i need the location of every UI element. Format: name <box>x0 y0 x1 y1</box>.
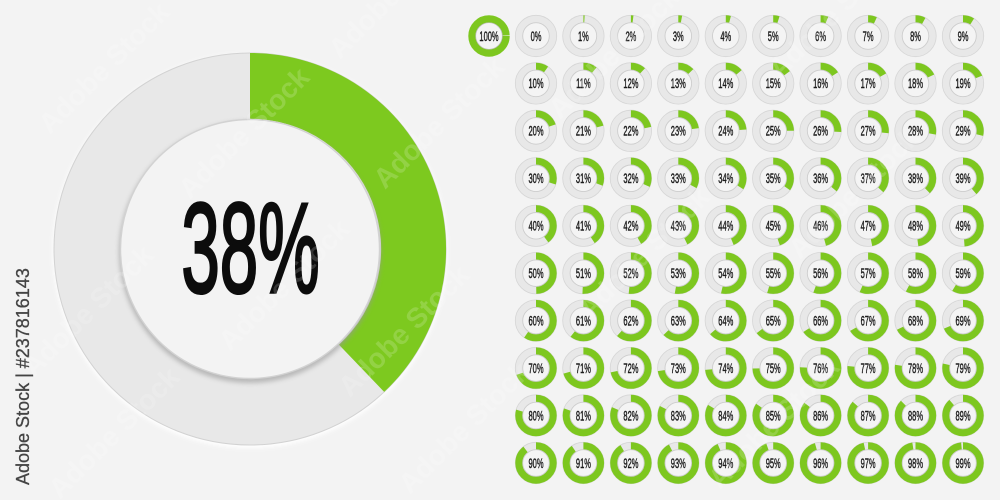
dial 59% <box>942 253 984 294</box>
watermarks: Adobe Stock <box>32 0 176 139</box>
dial 12% <box>610 63 652 104</box>
dial 85%: 85% <box>766 409 781 424</box>
dial 11% <box>563 63 604 104</box>
dial 68%: 68% <box>908 314 923 329</box>
dial 38% <box>895 158 936 199</box>
dial 45% <box>752 205 794 246</box>
dial 82% <box>610 395 652 436</box>
dial 32%: 32% <box>623 172 639 187</box>
dial 2%: 2% <box>625 30 637 45</box>
dial 23%: 23% <box>671 125 686 139</box>
dial 63%: 63% <box>671 314 686 329</box>
dial 19%: 19% <box>955 77 971 92</box>
dial 9% <box>942 15 984 57</box>
dial 22% <box>610 110 652 152</box>
dial 31%: 31% <box>576 172 591 187</box>
dial 69%: 69% <box>955 314 971 329</box>
watermarks: Adobe Stock <box>42 361 186 500</box>
dial 42% <box>610 205 652 246</box>
dial 12%: 12% <box>623 77 639 92</box>
dial 17%: 17% <box>861 77 876 92</box>
dial 17% <box>847 63 889 104</box>
dial 48% <box>895 205 936 246</box>
dial 36% <box>800 158 841 199</box>
dial 88% <box>895 395 936 436</box>
dial 42%: 42% <box>623 219 639 234</box>
dial 97% <box>847 442 889 484</box>
watermarks: Adobe Stock <box>367 51 511 194</box>
dial 9%: 9% <box>958 30 969 45</box>
dial 85% <box>752 395 794 436</box>
dial 35%: 35% <box>766 172 781 187</box>
center disc <box>120 120 380 378</box>
dial 24% <box>705 110 746 152</box>
dial 10%: 10% <box>528 77 544 92</box>
dial 77% <box>847 347 889 389</box>
dial 54%: 54% <box>718 267 734 282</box>
dial 65%: 65% <box>766 314 781 329</box>
dial 33% <box>658 158 699 199</box>
stock id vertical text: Adobe Stock | #237816143 <box>13 268 33 485</box>
dial 18% <box>895 63 936 104</box>
dial 55% <box>752 253 794 294</box>
dial 60%: 60% <box>528 314 544 329</box>
dial 98% <box>895 442 936 484</box>
dial 89%: 89% <box>955 409 971 424</box>
dial 31% <box>563 158 604 199</box>
dial 95% <box>752 442 794 484</box>
dial 66%: 66% <box>813 314 828 329</box>
dial 65% <box>752 300 794 341</box>
dial 11%: 11% <box>576 77 591 92</box>
dial 90% <box>515 442 557 484</box>
dial 75% <box>752 347 794 389</box>
dial 83% <box>658 395 699 436</box>
watermarks: Adobe Stock <box>702 351 846 494</box>
dial 6% <box>800 15 841 57</box>
dial 29% <box>942 110 984 152</box>
dial 64% <box>705 300 746 341</box>
dial 15% <box>752 63 794 104</box>
center disc shadow <box>119 121 381 383</box>
dial 76%: 76% <box>813 362 828 377</box>
dial 75%: 75% <box>766 362 781 377</box>
dial 68% <box>895 300 936 341</box>
dial 56% <box>800 253 841 294</box>
dial 5%: 5% <box>768 30 779 45</box>
dial 84%: 84% <box>718 409 734 424</box>
dial 98%: 98% <box>908 457 923 472</box>
dial 94% <box>705 442 746 484</box>
dial 46% <box>800 205 841 246</box>
dial 69% <box>942 300 984 341</box>
dial 52% <box>610 253 652 294</box>
dial 70% <box>515 347 557 389</box>
big percentage value: 38% <box>181 177 320 320</box>
dial 14%: 14% <box>718 77 734 92</box>
dial 4% <box>705 15 746 57</box>
dial 43% <box>658 205 699 246</box>
dial 3% <box>658 15 699 57</box>
dial 67%: 67% <box>861 314 876 329</box>
dial 4%: 4% <box>720 30 731 45</box>
dial 87% <box>847 395 889 436</box>
dial 39% <box>942 158 984 199</box>
dial 25% <box>752 110 794 152</box>
dial grid: 0 to 100 percent <box>472 15 984 484</box>
dial 87%: 87% <box>861 409 876 424</box>
dial 7% <box>847 15 889 57</box>
dial 54% <box>705 253 746 294</box>
dial 96% <box>800 442 841 484</box>
dial 80% <box>515 395 557 436</box>
dial 40%: 40% <box>528 219 544 234</box>
dial 7%: 7% <box>863 30 874 45</box>
large donut chart: 38% <box>53 53 447 448</box>
dial 40% <box>515 205 557 246</box>
dial 5% <box>752 15 794 57</box>
dial 20% <box>515 110 557 152</box>
dial 32% <box>610 158 652 199</box>
dial 27% <box>847 110 889 152</box>
dial 10% <box>515 63 557 104</box>
dial 76% <box>800 347 841 389</box>
dial 15%: 15% <box>766 77 781 92</box>
donut track <box>54 53 446 445</box>
dial 41%: 41% <box>576 219 591 234</box>
dial 3%: 3% <box>673 30 684 45</box>
dial 55%: 55% <box>766 267 781 282</box>
watermarks: Adobe Stock <box>392 356 536 499</box>
dial 16%: 16% <box>813 77 828 92</box>
dial 27%: 27% <box>861 125 876 139</box>
dial 38%: 38% <box>908 172 923 187</box>
dial 28% <box>895 110 936 152</box>
dial 29%: 29% <box>955 125 971 139</box>
dial 26% <box>800 110 841 152</box>
dial 74% <box>705 347 746 389</box>
dial 93%: 93% <box>671 457 686 472</box>
dial 30%: 30% <box>528 172 544 187</box>
dial 81%: 81% <box>576 409 591 424</box>
dial 74%: 74% <box>718 362 734 377</box>
dial 43%: 43% <box>671 219 686 234</box>
dial 80%: 80% <box>528 409 544 424</box>
dial 100% <box>472 19 506 53</box>
dial 44%: 44% <box>718 219 734 234</box>
dial 93% <box>658 442 699 484</box>
dial 50% <box>515 253 557 294</box>
dial 53%: 53% <box>671 267 686 282</box>
dial 33%: 33% <box>671 172 686 187</box>
dial 46%: 46% <box>813 219 828 234</box>
dial 62% <box>610 300 652 341</box>
dial 64%: 64% <box>718 314 734 329</box>
dial 1%: 1% <box>578 30 589 45</box>
donut green segment 38% <box>250 53 446 392</box>
dial 61% <box>563 300 604 341</box>
watermarks: Adobe Stock <box>782 121 926 264</box>
dial 37%: 37% <box>861 172 876 187</box>
dial 6%: 6% <box>815 30 826 45</box>
watermarks: Adobe Stock <box>572 181 716 324</box>
dial 86%: 86% <box>813 409 828 424</box>
dial 60% <box>515 300 557 341</box>
dial 79%: 79% <box>955 362 971 377</box>
dial 81% <box>563 395 604 436</box>
dial 56%: 56% <box>813 267 828 282</box>
dial 13%: 13% <box>671 77 686 92</box>
dial 95%: 95% <box>766 457 781 472</box>
dial 94%: 94% <box>718 457 734 472</box>
dial 79% <box>942 347 984 389</box>
dial 70%: 70% <box>528 362 544 377</box>
donut highlight <box>53 54 447 448</box>
dial 61%: 61% <box>576 314 591 329</box>
dial 78% <box>895 347 936 389</box>
dial 0% <box>515 15 557 57</box>
dial 41% <box>563 205 604 246</box>
dial 97%: 97% <box>861 457 876 472</box>
dial 1% <box>563 15 604 57</box>
dial 22%: 22% <box>623 125 639 139</box>
dial 57%: 57% <box>861 267 876 282</box>
dial 14% <box>705 63 746 104</box>
dial 59%: 59% <box>955 267 971 282</box>
dial 72%: 72% <box>623 362 639 377</box>
dial 100%: 100% <box>479 30 499 45</box>
dial 73%: 73% <box>671 362 686 377</box>
dial 16% <box>800 63 841 104</box>
dial 91% <box>563 442 604 484</box>
dial 71%: 71% <box>576 362 591 377</box>
dial 30% <box>515 158 557 199</box>
watermarks: Adobe Stock <box>332 259 476 402</box>
dial 23% <box>658 110 699 152</box>
dial 44% <box>705 205 746 246</box>
dial 57% <box>847 253 889 294</box>
dial 96%: 96% <box>813 457 828 472</box>
dial 78%: 78% <box>908 362 923 377</box>
dial 35% <box>752 158 794 199</box>
dial 45%: 45% <box>766 219 781 234</box>
dial 18%: 18% <box>908 77 923 92</box>
dial 36%: 36% <box>813 172 828 187</box>
dial 63% <box>658 300 699 341</box>
dial 89% <box>942 395 984 436</box>
dial 21%: 21% <box>576 125 591 139</box>
dial 25%: 25% <box>766 125 781 139</box>
dial 0%: 0% <box>531 30 542 45</box>
dial 72% <box>610 347 652 389</box>
dial 49% <box>942 205 984 246</box>
dial 47%: 47% <box>861 219 876 234</box>
dial 50%: 50% <box>528 267 544 282</box>
dial 92% <box>610 442 652 484</box>
dial 82%: 82% <box>623 409 639 424</box>
dial 84% <box>705 395 746 436</box>
dial 26%: 26% <box>813 125 828 139</box>
dial 58% <box>895 253 936 294</box>
dial 52%: 52% <box>623 267 639 282</box>
dial 8%: 8% <box>910 30 921 45</box>
dial 90%: 90% <box>528 457 544 472</box>
watermarks: Adobe Stock <box>16 239 160 382</box>
dial 37% <box>847 158 889 199</box>
dial 73% <box>658 347 699 389</box>
watermarks: Adobe Stock <box>212 213 356 356</box>
dial 28%: 28% <box>908 125 923 139</box>
dial 51% <box>563 253 604 294</box>
dial 47% <box>847 205 889 246</box>
dial 58%: 58% <box>908 267 923 282</box>
dial 20%: 20% <box>528 125 544 139</box>
dial 49%: 49% <box>955 219 971 234</box>
dial 99% <box>942 442 984 484</box>
dial 39%: 39% <box>955 172 971 187</box>
dial 19% <box>942 63 984 104</box>
dial 48%: 48% <box>908 219 923 234</box>
dial 92%: 92% <box>623 457 639 472</box>
dial 34%: 34% <box>718 172 734 187</box>
dial 34% <box>705 158 746 199</box>
dial 21% <box>563 110 604 152</box>
dial 53% <box>658 253 699 294</box>
dial 91%: 91% <box>576 457 591 472</box>
dial 86% <box>800 395 841 436</box>
dial 88%: 88% <box>908 409 923 424</box>
dial 62%: 62% <box>623 314 639 329</box>
dial 77%: 77% <box>861 362 876 377</box>
dial 8% <box>895 15 936 57</box>
dial 2% <box>610 15 652 57</box>
dial 66% <box>800 300 841 341</box>
dial 67% <box>847 300 889 341</box>
dial 71% <box>563 347 604 389</box>
dial 99%: 99% <box>955 457 971 472</box>
dial 51%: 51% <box>576 267 591 282</box>
dial 24%: 24% <box>718 125 734 139</box>
dial 13% <box>658 63 699 104</box>
watermarks: Adobe Stock <box>172 61 316 204</box>
dial 83%: 83% <box>671 409 686 424</box>
